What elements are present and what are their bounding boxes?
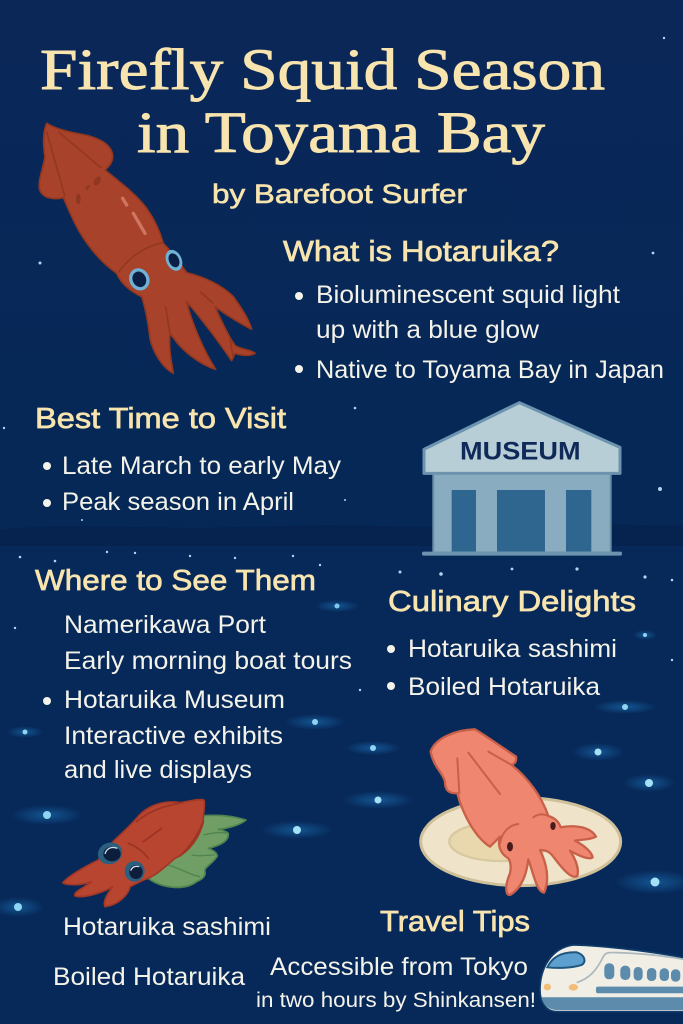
bullet list: best time: Peak season in April	[62, 488, 294, 516]
list: viewing locations	[43, 611, 352, 784]
heading: travel tips: Travel Tips	[380, 906, 530, 938]
plate	[421, 798, 621, 886]
list: viewing locations: and live displays	[64, 756, 252, 784]
section: best time to visit	[35, 403, 342, 516]
squid eyes	[507, 822, 556, 851]
shiso leaf	[148, 815, 246, 887]
squid body	[63, 800, 204, 907]
small stars	[3, 37, 673, 691]
background: night sky	[0, 0, 683, 530]
text: travel advice	[256, 953, 536, 1012]
bullet list: dishes: Boiled Hotaruika	[408, 673, 600, 701]
bullet list: what is hotaruika	[295, 281, 664, 384]
section: where to see them	[35, 565, 352, 784]
bullet list: what is hotaruika: up with a blue glow	[316, 316, 540, 344]
squid eyes	[95, 839, 145, 882]
title: in Toyama Bay	[137, 100, 545, 165]
section: travel tips	[256, 906, 536, 1012]
section: what is hotaruika	[283, 236, 664, 384]
section: culinary delights	[387, 586, 636, 701]
caption: hotaruika sashimi: Hotaruika sashimi	[63, 913, 271, 941]
glowing squid lights on the water	[0, 600, 683, 917]
bullet list: best time	[43, 452, 342, 516]
text: travel advice: in two hours by Shinkansen!	[256, 989, 536, 1012]
title	[40, 37, 605, 165]
list: viewing locations: Hotaruika Museum	[64, 686, 285, 714]
heading: culinary delights: Culinary Delights	[388, 586, 636, 618]
background: sea	[0, 546, 683, 1024]
squid eyes	[125, 247, 186, 294]
illustration: shinkansen train	[540, 945, 683, 1012]
museum sign: MUSEUM	[460, 438, 581, 466]
bullet list: best time: Late March to early May	[62, 452, 342, 480]
bullet list: what is hotaruika: Native to Toyama Bay in Japan	[316, 356, 664, 384]
illustration: hotaruika sashimi on leaf	[63, 800, 246, 907]
caption: boiled hotaruika: Boiled Hotaruika	[53, 963, 245, 991]
heading: best time to visit: Best Time to Visit	[35, 403, 286, 435]
title: Firefly Squid Season	[40, 37, 605, 102]
list: viewing locations: Interactive exhibits	[64, 722, 283, 750]
bullet list: what is hotaruika: Bioluminescent squid light	[316, 281, 620, 309]
illustration: large firefly squid	[39, 123, 255, 373]
list: viewing locations: Namerikawa Port	[64, 611, 266, 639]
list: viewing locations: Early morning boat tours	[64, 647, 352, 675]
illustration: boiled hotaruika on plate	[421, 729, 621, 895]
illustration: museum building	[422, 403, 622, 556]
bullet list: dishes	[387, 635, 617, 701]
heading: what is hotaruika: What is Hotaruika?	[283, 236, 559, 268]
heading: where to see them: Where to See Them	[35, 565, 316, 597]
byline: by Barefoot Surfer	[212, 179, 467, 209]
text: travel advice: Accessible from Tokyo	[270, 953, 528, 981]
bullet list: dishes: Hotaruika sashimi	[408, 635, 617, 663]
squid body	[431, 729, 596, 895]
background: distant shoreline	[0, 524, 683, 546]
